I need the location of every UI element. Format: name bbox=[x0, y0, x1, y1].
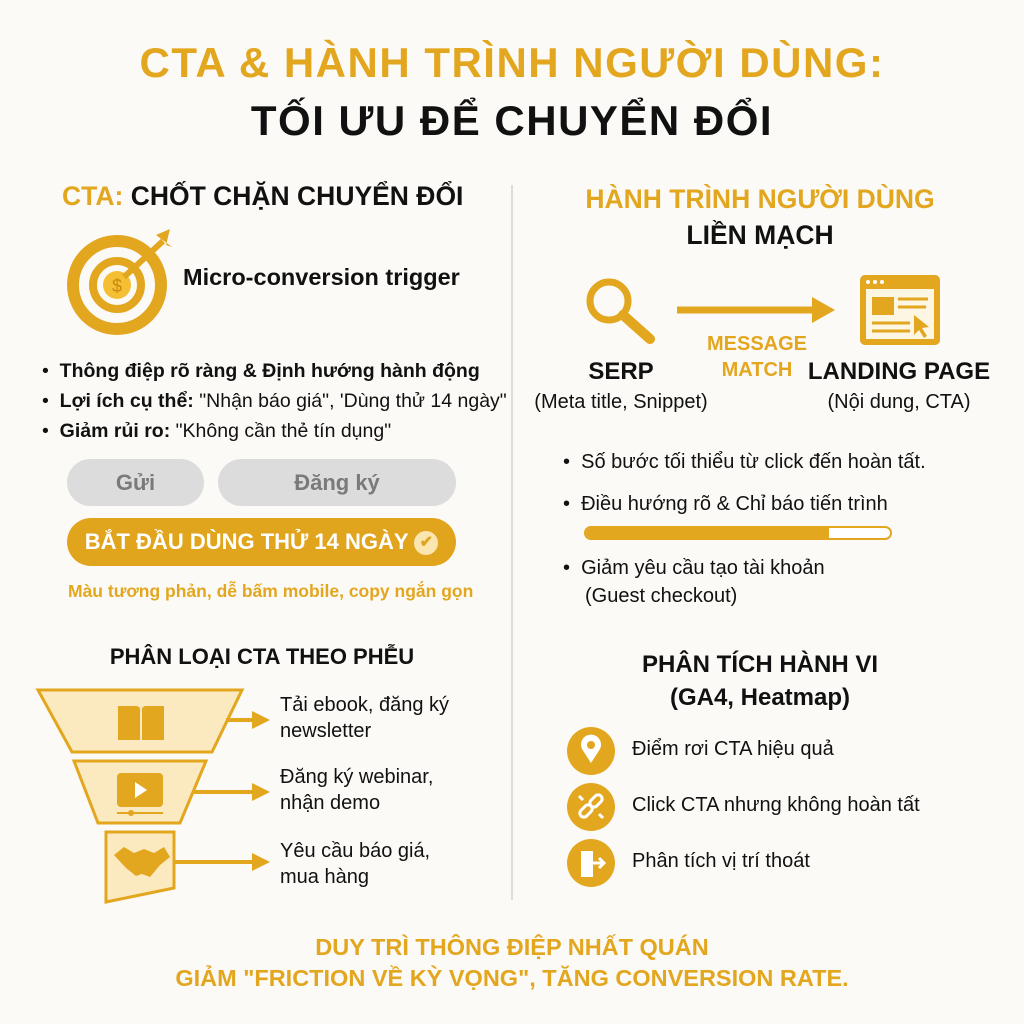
caption: Màu tương phản, dễ bấm mobile, copy ngắn gọn bbox=[68, 581, 473, 601]
analytics list: Điểm rơi CTA hiệu quả bbox=[632, 738, 834, 760]
bullet: guest checkout: • Giảm yêu cầu tạo tài khoản bbox=[563, 557, 825, 579]
bullets left: • Giảm rủi ro: "Không cần thẻ tín dụng" bbox=[42, 420, 391, 442]
button: Đăng ký: Đăng ký bbox=[294, 470, 380, 495]
footer: DUY TRÌ THÔNG ĐIỆP NHẤT QUÁN bbox=[315, 934, 709, 960]
divider bbox=[511, 185, 513, 900]
label: landing page: (Nội dung, CTA) bbox=[827, 391, 970, 413]
bullets right bbox=[563, 451, 926, 515]
button: Đăng ký bbox=[218, 459, 456, 506]
label: landing page: LANDING PAGE bbox=[808, 358, 990, 385]
funnel labels: nhận demo bbox=[280, 792, 380, 814]
funnel labels bbox=[280, 694, 449, 888]
heading: journey: HÀNH TRÌNH NGƯỜI DÙNG bbox=[585, 184, 935, 214]
label: SERP: SERP bbox=[588, 358, 654, 385]
analytics list: Phân tích vị trí thoát bbox=[632, 850, 810, 872]
label: SERP: (Meta title, Snippet) bbox=[534, 391, 708, 413]
progress bar bbox=[584, 526, 892, 540]
button: Gửi bbox=[67, 459, 204, 506]
button: Gửi: Gửi bbox=[116, 470, 155, 495]
icon: target: $ bbox=[112, 276, 122, 296]
text: micro-conversion: Micro-conversion trigger bbox=[183, 264, 460, 290]
heading: analytics: PHÂN TÍCH HÀNH VI bbox=[642, 651, 878, 678]
analytics list: Click CTA nhưng không hoàn tất bbox=[632, 794, 920, 816]
arrow: message match bbox=[677, 297, 835, 323]
bullet: guest checkout bbox=[563, 557, 825, 607]
label: message match bbox=[707, 333, 807, 381]
funnel labels: Yêu cầu báo giá, bbox=[280, 840, 430, 862]
heading: CTA: CTA: CHỐT CHẶN CHUYỂN ĐỔI bbox=[62, 181, 463, 211]
bullets left: • Lợi ích cụ thể: "Nhận báo giá", 'Dùng thử 14 ngày" bbox=[42, 390, 507, 412]
title: CTA & HÀNH TRÌNH NGƯỜI DÙNG: bbox=[140, 39, 884, 86]
footer: GIẢM "FRICTION VỀ KỲ VỌNG", TĂNG CONVERSION RATE. bbox=[175, 965, 849, 991]
bullets right: • Số bước tối thiểu từ click đến hoàn tất. bbox=[563, 451, 926, 473]
icon: broken link bbox=[567, 783, 615, 831]
analytics list bbox=[567, 727, 920, 887]
heading: journey bbox=[585, 184, 935, 250]
funnel labels: newsletter bbox=[280, 720, 371, 742]
heading: analytics bbox=[642, 650, 878, 711]
title: TỐI ƯU ĐỂ CHUYỂN ĐỔI bbox=[251, 97, 773, 144]
heading: journey: LIỀN MẠCH bbox=[686, 220, 834, 250]
funnel labels: Đăng ký webinar, bbox=[280, 766, 433, 788]
button: main CTA: BẮT ĐẦU DÙNG THỬ 14 NGÀY bbox=[85, 529, 408, 554]
title bbox=[140, 39, 884, 144]
bullets left: • Thông điệp rõ ràng & Định hướng hành động bbox=[42, 360, 480, 382]
label: landing page bbox=[808, 358, 990, 413]
button: main CTA: ✔ bbox=[420, 534, 433, 551]
bullets left bbox=[42, 360, 507, 442]
label: message match: MATCH bbox=[722, 359, 792, 381]
funnel labels: Tải ebook, đăng ký bbox=[280, 694, 449, 716]
heading: analytics: (GA4, Heatmap) bbox=[670, 684, 850, 711]
icon: magnifier bbox=[586, 278, 655, 344]
button: main CTA bbox=[67, 518, 456, 566]
icon: landing page bbox=[860, 275, 940, 345]
bullet: guest checkout: (Guest checkout) bbox=[585, 585, 737, 607]
bullets right: • Điều hướng rõ & Chỉ báo tiến trình bbox=[563, 493, 888, 515]
label: SERP bbox=[534, 358, 708, 413]
icon: pin bbox=[567, 727, 615, 775]
footer bbox=[175, 934, 849, 991]
label: message match: MESSAGE bbox=[707, 333, 807, 355]
icon: exit door bbox=[567, 839, 615, 887]
funnel labels: mua hàng bbox=[280, 866, 369, 888]
heading: funnel: PHÂN LOẠI CTA THEO PHỄU bbox=[110, 644, 414, 669]
icon: target bbox=[67, 229, 172, 335]
funnel chart bbox=[36, 688, 270, 904]
